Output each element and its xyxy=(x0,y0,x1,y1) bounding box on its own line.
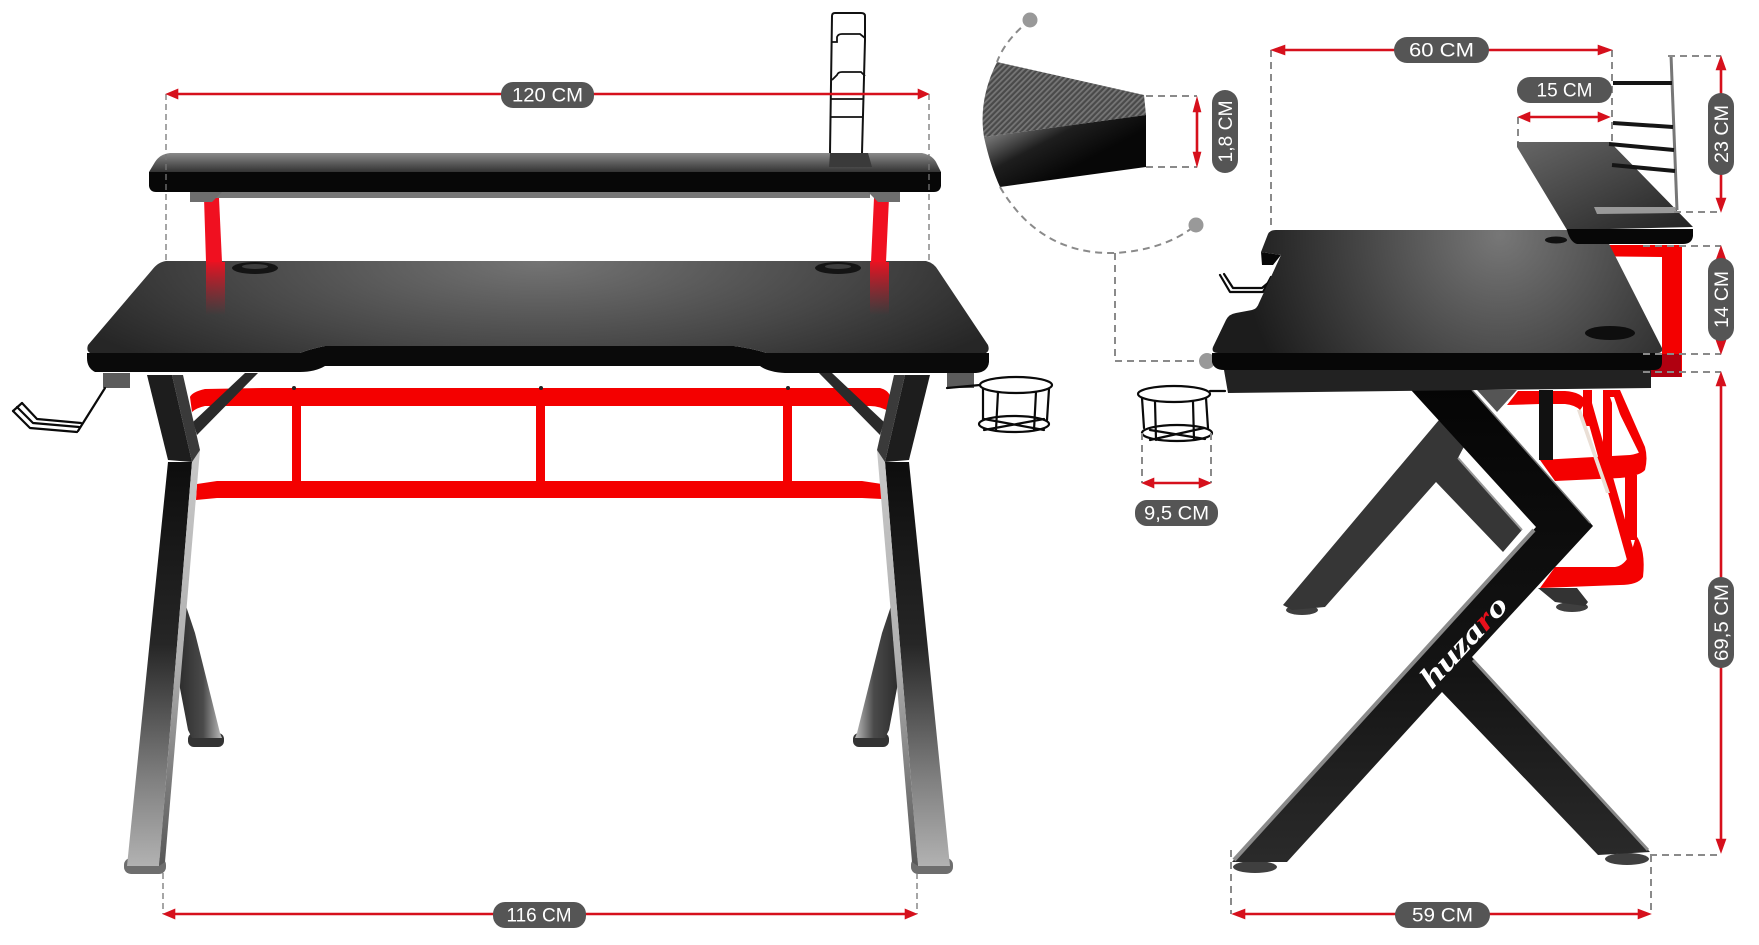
arrow: 116 cm xyxy=(163,909,917,919)
front view: headset stand xyxy=(829,13,872,167)
red cross frame xyxy=(190,386,890,500)
side view: cup holder xyxy=(1138,386,1225,441)
detail: dashed lens outline with dots xyxy=(997,12,1215,369)
label: 23 cm xyxy=(1708,93,1734,175)
front view: main desktop xyxy=(87,261,989,373)
label: 15 cm xyxy=(1517,77,1612,103)
cable grommets xyxy=(232,262,278,274)
label: 59 cm xyxy=(1395,902,1490,928)
arrow: 120 cm xyxy=(166,89,929,99)
label: 1.8 cm: 1,8 CM xyxy=(1216,100,1237,163)
label: 1.8 cm xyxy=(1212,90,1238,173)
front view: upper shelf xyxy=(149,153,941,202)
side view: red shelf bracket xyxy=(1571,245,1682,377)
logo: huzaro: huzaro xyxy=(1413,589,1515,695)
label: 9.5 cm: 9,5 CM xyxy=(1144,504,1209,524)
label: 14 cm: 14 CM xyxy=(1712,271,1733,328)
arrow: 69.5 cm xyxy=(1716,372,1726,853)
arrow: 23 cm xyxy=(1716,56,1726,212)
front view: cup holder xyxy=(947,377,1052,432)
label: 59 cm: 59 CM xyxy=(1412,906,1473,926)
side view: headset stand xyxy=(1609,55,1677,210)
front view: headset hook xyxy=(13,388,105,432)
label: 116 cm: 116 CM xyxy=(506,906,572,926)
label: 60 cm xyxy=(1394,37,1489,63)
left leg assembly xyxy=(103,373,258,874)
side view: stand base plate xyxy=(1594,207,1677,214)
arrow: 14 cm xyxy=(1716,246,1726,354)
label: 14 cm xyxy=(1708,258,1734,341)
label: 69.5 cm xyxy=(1708,577,1734,668)
label: 23 cm: 23 CM xyxy=(1712,105,1733,163)
label: 15 cm: 15 CM xyxy=(1536,80,1592,102)
detail: thickness dashes xyxy=(1146,96,1197,167)
side view: main Z leg xyxy=(1232,390,1650,873)
side view: red cage xyxy=(1507,390,1646,588)
right leg assembly xyxy=(819,373,974,874)
detail: desktop thickness wedge xyxy=(983,62,1146,187)
width dashes front view xyxy=(163,94,929,914)
arrow: 60 cm xyxy=(1271,45,1612,55)
side view: rear legs xyxy=(1283,390,1588,615)
arrow: 1.8 cm xyxy=(1193,97,1201,167)
label: 120 cm xyxy=(501,82,594,108)
side view: desk xyxy=(1212,230,1662,393)
front view: red shelf supports xyxy=(204,198,889,316)
side view: upper shelf xyxy=(1517,142,1693,244)
label: 60 cm: 60 CM xyxy=(1409,40,1474,62)
label: 116 cm xyxy=(493,902,586,928)
side view: dimension dashes xyxy=(1142,50,1721,914)
label: 120 cm: 120 CM xyxy=(512,86,583,106)
label: 69.5 cm: 69,5 CM xyxy=(1712,584,1733,661)
front view: desk structure xyxy=(103,373,974,874)
side view: cage post xyxy=(1539,390,1553,460)
side view: headset hook xyxy=(1220,274,1271,292)
label: 9.5 cm xyxy=(1135,500,1218,526)
arrow: 59 cm xyxy=(1232,909,1651,919)
side view: grommet xyxy=(1585,326,1635,340)
arrow: 15 cm xyxy=(1518,112,1610,122)
arrow: 9.5 cm xyxy=(1142,478,1211,488)
